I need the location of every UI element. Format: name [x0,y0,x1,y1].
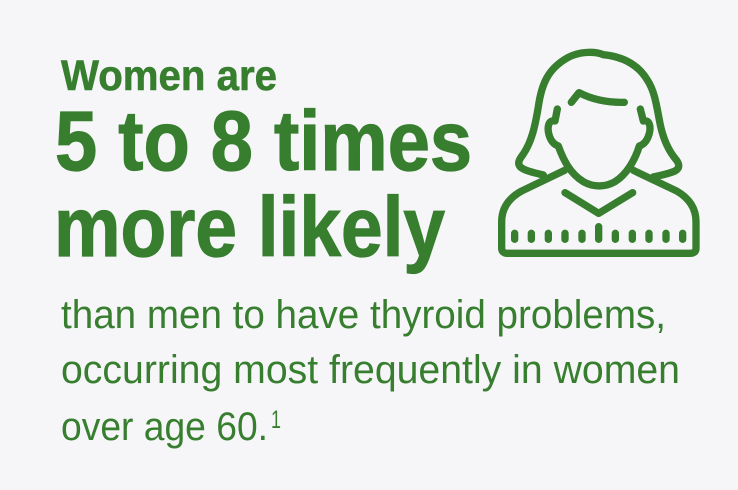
icon: woman [502,52,696,253]
heading: more likely: more likely [54,180,445,274]
text block: body copy: occurring most frequently in women [61,348,680,392]
heading: 5 to 8 times: 5 to 8 times [55,94,472,188]
text block: body copy: over age 60. [61,405,268,449]
text block: body copy: than men to have thyroid problems, [61,293,666,337]
heading: Women are: Women are [61,52,277,100]
text block: body copy [61,293,680,449]
text block: body copy: 1 [271,406,281,434]
